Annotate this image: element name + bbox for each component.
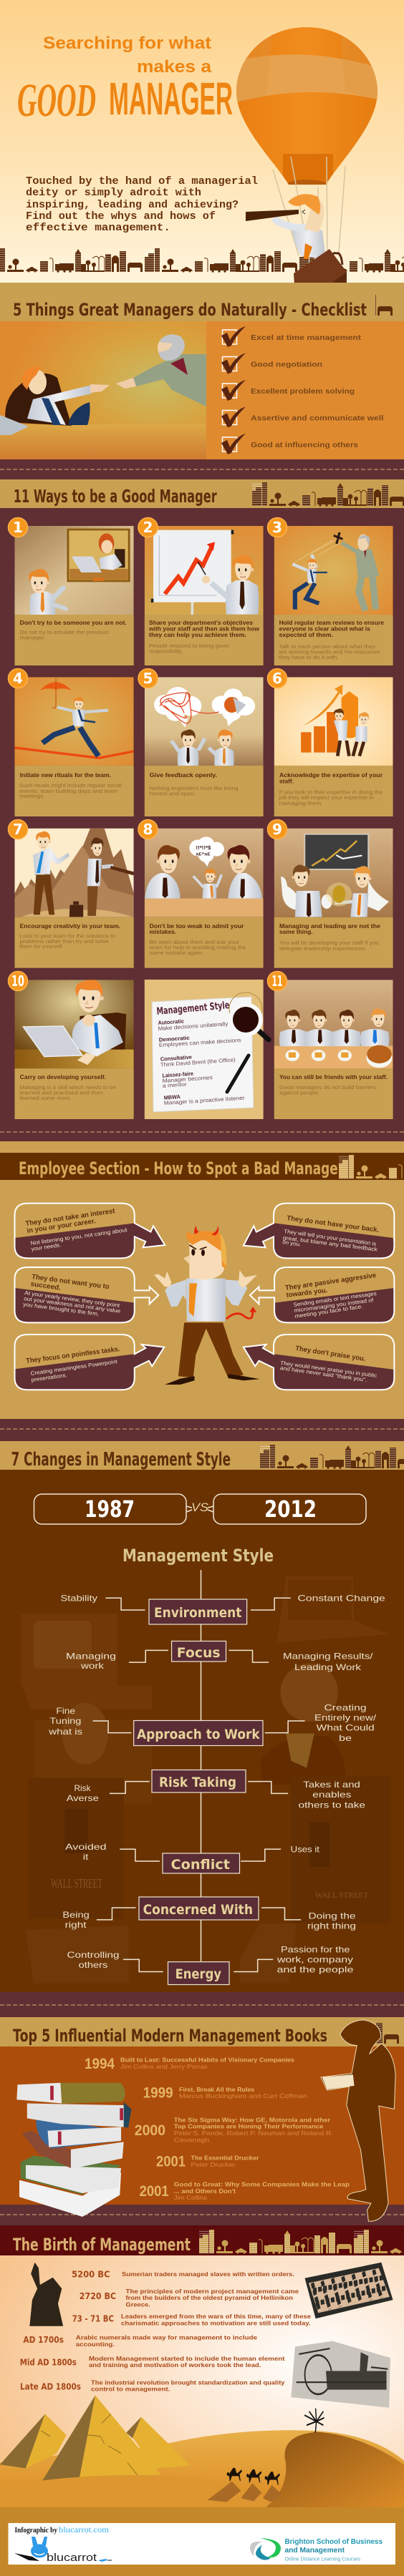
statue engraving xyxy=(29,2263,63,2326)
card copy xyxy=(19,619,388,1101)
card copy: managing them. xyxy=(279,800,323,806)
machine engraving xyxy=(291,2341,390,2408)
bubble copy: At your yearly review, they only point xyxy=(24,1289,121,1309)
bubble copy: They would never praise you in public xyxy=(280,1360,377,1379)
comparison labels: Entirely new/ xyxy=(314,1713,377,1723)
card 6 illustration xyxy=(274,677,393,766)
book list: Jim Collins xyxy=(174,2194,207,2201)
panel: top 5 books xyxy=(0,2017,404,2225)
comparison labels: Passion for the xyxy=(281,1945,350,1955)
comparison labels: Being xyxy=(62,1910,90,1920)
credit: brighton school: and Management xyxy=(285,2547,345,2555)
comparison labels: Averse xyxy=(67,1793,99,1803)
comparison labels: Risk xyxy=(74,1783,91,1793)
card 10 illustration xyxy=(15,979,134,1068)
illustrations rows one and two xyxy=(15,526,393,768)
bubble copy: They are passive aggressive xyxy=(284,1272,377,1292)
bubble: interest xyxy=(15,1204,165,1258)
card copy: Initiate new rituals for the team. xyxy=(20,771,111,779)
reading silhouette xyxy=(321,2020,395,2221)
note: management style: Consultative xyxy=(160,1054,192,1063)
bubble copy: succeed. xyxy=(30,1280,62,1292)
comparison labels: others to take xyxy=(298,1800,365,1810)
year comparison header: VS xyxy=(191,1501,209,1514)
card copy: they have to do it with. xyxy=(279,654,339,660)
bubble copy: in you or your career. xyxy=(27,1217,96,1235)
faint background images xyxy=(21,1576,390,1984)
bubble copy: They will tell you your presentation is xyxy=(284,1228,377,1247)
card 8 illustration: x£^x£ xyxy=(196,852,211,857)
year comparison header: 2012 xyxy=(264,1496,317,1523)
credit: blucarrot: Infographic by xyxy=(14,2527,57,2534)
credit: blucarrot: blucarrot xyxy=(47,2552,97,2564)
intro text xyxy=(26,175,258,234)
timeline events: Sumerian traders managed slaves with written orders. xyxy=(122,2270,294,2278)
card copy: against people. xyxy=(279,1089,319,1096)
credit: brighton school xyxy=(250,2538,383,2562)
card copy: honest and open. xyxy=(150,791,196,797)
comparison labels: Managing Results/ xyxy=(283,1652,373,1662)
timeline tree: Environment xyxy=(154,1605,241,1621)
heading: 11 ways: 11 Ways to be a Good Manager xyxy=(14,486,217,507)
timeline events: from the builders of the oldest pyramid of Hellinikon xyxy=(126,2294,293,2301)
book list xyxy=(85,2056,350,2201)
card copy: manager. xyxy=(20,634,46,641)
number badges: 6 xyxy=(272,670,282,687)
comparison labels: Doing the xyxy=(308,1911,356,1921)
bubble copy xyxy=(23,1207,380,1383)
card copy: Be open about them and ask your xyxy=(150,939,240,945)
note: management style: Autocratic xyxy=(158,1018,184,1026)
comparison labels: Constant Change xyxy=(298,1594,385,1604)
book list: 2001 xyxy=(156,2153,186,2170)
timeline events: AD 1700s xyxy=(23,2335,64,2345)
bubble copy: out your weakness and not any value xyxy=(24,1295,121,1314)
comparison labels: Tuning xyxy=(49,1716,81,1726)
bubble copy: They do not have your back. xyxy=(287,1214,380,1234)
card copy: Don't be too weak to admit your xyxy=(150,922,244,930)
bubble copy: meeting you face to face. xyxy=(294,1303,363,1319)
card copy: delegate leadership experiences. xyxy=(279,945,367,952)
card copy: mistakes. xyxy=(150,928,176,935)
bubble copy: you have brought to the firm. xyxy=(23,1301,100,1317)
note: management style: a mentor xyxy=(163,1081,188,1089)
intro text: Find out the whys and hows of xyxy=(26,210,216,223)
card copy: Look to your team for the solutions to xyxy=(20,933,115,940)
card 7 illustration xyxy=(15,829,135,917)
card 4 illustration xyxy=(15,677,134,766)
illustrations row four xyxy=(15,979,393,1068)
card 2 illustration xyxy=(145,526,264,615)
comparison labels xyxy=(48,1594,385,1975)
bubble copy: Creating meaningless Powerpoint xyxy=(30,1358,118,1377)
comparison labels: what is xyxy=(48,1727,82,1737)
year comparison header: 1987 xyxy=(85,1496,135,1523)
timeline events: Arabic numerals made way for management to include xyxy=(76,2334,257,2341)
heading: birth: The Birth of Management xyxy=(13,2235,191,2255)
timeline tree: Focus xyxy=(177,1645,221,1661)
panel: checklist section xyxy=(0,283,404,459)
card copy: expected of them. xyxy=(279,631,333,638)
card copy: problems rather than try and solve xyxy=(20,938,109,945)
panel: employee section, bad manager xyxy=(0,1141,404,1419)
bubble copy: on you. xyxy=(282,1239,302,1248)
timeline events: The industrial revolution brought standardization and quality xyxy=(91,2379,285,2386)
card copy: You will be developing your staff if you xyxy=(279,940,379,946)
intro text: Touched by the hand of a managerial xyxy=(26,175,258,187)
book stack xyxy=(16,2083,131,2217)
checklist: Good negotiation xyxy=(251,361,322,369)
number badges: 10 xyxy=(11,972,24,990)
book list: 2000 xyxy=(135,2122,165,2139)
book list: Good to Great: Why Some Companies Make the Leap xyxy=(174,2181,350,2188)
timeline tree: Approach to Work xyxy=(137,1727,260,1742)
card copy: same thing. xyxy=(279,928,313,935)
timeline events: accounting. xyxy=(76,2341,115,2348)
credit: blucarrot xyxy=(14,2524,112,2564)
card copy: Don't try to be someone you are not. xyxy=(20,619,127,626)
comparison labels: Fine xyxy=(56,1706,75,1716)
note: management style: Management Style xyxy=(156,1000,230,1018)
number badges: 9 xyxy=(272,821,282,838)
comparison labels: be xyxy=(339,1733,352,1743)
number badges: 5 xyxy=(143,670,153,687)
timeline events: Modern Management started to include the human element xyxy=(89,2355,285,2362)
book list: Peter Drucker xyxy=(191,2161,236,2168)
card copy: responsibility. xyxy=(149,648,183,655)
illustrations row three xyxy=(15,829,393,917)
number badges: 2 xyxy=(143,519,153,536)
card copy: Carry on developing yourself. xyxy=(20,1073,106,1080)
comparison labels: Leading Work xyxy=(294,1662,362,1672)
comparison labels: Creating xyxy=(324,1703,367,1713)
timeline events: 73 - 71 BC xyxy=(72,2313,114,2323)
book list: The Essential Drucker xyxy=(191,2154,259,2161)
note: management style: Make decisions unilaterally xyxy=(158,1020,229,1032)
card copy: events, team building days and team xyxy=(19,788,117,794)
desert scene xyxy=(0,2395,404,2507)
number badges: 3 xyxy=(272,519,282,536)
intro text: inspiring, leading and achieving? xyxy=(26,199,239,211)
number badges xyxy=(9,518,287,990)
number badges: 11 xyxy=(272,972,282,990)
timeline events: The principles of modern project management came xyxy=(126,2288,299,2295)
card copy: Hold regular team reviews to ensure xyxy=(279,619,384,626)
comparison labels: What Could xyxy=(317,1723,375,1733)
comparison labels: others xyxy=(79,1960,107,1970)
panel: footer credits xyxy=(0,2507,404,2576)
panel: 11 ways section xyxy=(0,479,404,1141)
card copy: learned and practised and then xyxy=(20,1089,103,1096)
devil manager character xyxy=(154,1226,260,1385)
timeline events xyxy=(20,2270,311,2393)
basket xyxy=(294,249,347,298)
timeline events: Mid AD 1800s xyxy=(20,2358,77,2368)
card copy: Managing and leading are not the xyxy=(279,922,380,930)
comparison labels: and the people xyxy=(276,1965,354,1975)
card copy: You can still be friends with your staff. xyxy=(279,1073,388,1080)
card copy: they can help you achieve them. xyxy=(149,631,246,638)
card copy: Nothing engenders trust like being xyxy=(150,785,239,791)
comparison labels: Uses it xyxy=(291,1845,320,1855)
bubble: pointless tasks xyxy=(15,1335,164,1390)
credit: blucarrot: blucarrot.com xyxy=(59,2524,110,2534)
bubble copy: great, but blame any bad feedback xyxy=(282,1234,378,1253)
card copy: If you look to their expertise in doing the xyxy=(279,789,383,796)
card 9 illustration xyxy=(274,829,393,917)
bubble: succeed xyxy=(15,1267,158,1322)
intro text: effective management. xyxy=(26,222,170,234)
title: Searching for what xyxy=(43,34,211,53)
card 8 illustration: !!*!!*$ xyxy=(196,844,211,851)
card copy: everyone is clear about what is xyxy=(279,625,370,633)
comparison labels: Takes it and xyxy=(303,1780,360,1790)
card copy: same mistake again. xyxy=(150,950,203,956)
card copy: Do not try to emulate the previous xyxy=(20,629,109,635)
number badges: 8 xyxy=(143,821,153,838)
bubble copy: They do not take an interest xyxy=(25,1207,116,1228)
engravings xyxy=(29,2263,393,2408)
timeline tree: Energy xyxy=(175,1966,222,1982)
timeline events: Leaders emerged from the wars of this time, many of these xyxy=(121,2313,311,2320)
card copy: learned some more. xyxy=(20,1095,72,1101)
book list: 2001 xyxy=(140,2183,169,2200)
note: management style: Laissez-faire xyxy=(162,1070,193,1079)
card 5 illustration xyxy=(145,677,264,768)
card 1 illustration xyxy=(15,526,134,616)
card 11 illustration xyxy=(274,980,393,1068)
timeline events: charismatic approaches to motivation are still used today. xyxy=(121,2320,311,2327)
book list: The Six Sigma Way: How GE, Motorola and other xyxy=(174,2117,331,2124)
card 8 illustration xyxy=(145,829,264,917)
checklist xyxy=(221,326,384,454)
card copy: job they will respect your expertise in xyxy=(279,794,374,801)
timeline tree: Risk Taking xyxy=(159,1775,236,1790)
bubble copy: presentations. xyxy=(31,1372,67,1383)
timeline tree: Concerned With xyxy=(143,1902,253,1918)
timeline tree: Conflict xyxy=(170,1857,230,1873)
card copy: Good managers do not build barriers xyxy=(279,1084,376,1091)
number badges: 1 xyxy=(13,519,23,536)
illustration: creation of manager xyxy=(0,321,206,459)
comparison labels: work, company xyxy=(276,1955,353,1965)
number badges: 4 xyxy=(13,670,23,687)
card copy: Share your department's objectives xyxy=(149,619,253,626)
comparison labels: work xyxy=(80,1661,105,1671)
number badges: 7 xyxy=(13,821,23,838)
timeline events: 2720 BC xyxy=(80,2291,116,2301)
card copy: Encourage creativity in your team. xyxy=(20,922,120,930)
title: MANAGER xyxy=(109,73,233,125)
note: management style: Think David Brent (the Office) xyxy=(160,1056,236,1068)
card copy: staff. xyxy=(279,778,294,785)
book list: Marcus Buckingham and Curt Coffman xyxy=(179,2092,307,2099)
bubble copy: and have never said "thank you". xyxy=(279,1365,367,1383)
card copy: Talk to each person about what they xyxy=(279,643,375,650)
note: management style: Manager is a proactive listener xyxy=(164,1095,245,1106)
hot air balloon xyxy=(233,27,381,255)
bubble copy: They focus on pointless tasks. xyxy=(26,1345,120,1365)
book list: Peter S. Pande, Robert P. Neuman and Roland R. xyxy=(174,2129,333,2137)
panel: the birth of management xyxy=(0,2225,404,2507)
timeline events: and training and motivation of workers took the lead. xyxy=(89,2361,261,2368)
panel: 7 changes in management style xyxy=(0,1441,404,1992)
timeline events: 5200 BC xyxy=(72,2270,110,2280)
panel: hero with balloon xyxy=(0,0,404,298)
title: GOOD xyxy=(17,74,96,127)
card copy: Acknowledge the expertise of your xyxy=(279,771,383,779)
comparison labels: it xyxy=(83,1852,89,1862)
man with telescope xyxy=(246,194,326,259)
card copy: team for help in avoiding making the xyxy=(150,945,246,950)
abacus xyxy=(305,2263,393,2318)
year comparison header xyxy=(34,1494,366,1524)
book list: 1999 xyxy=(143,2085,173,2102)
note: management style: Manager becomes xyxy=(162,1074,213,1084)
note: management style: Employees can make decisions xyxy=(159,1037,241,1048)
card copy: them for yourself. xyxy=(20,943,64,950)
comparison labels: Stability xyxy=(60,1594,97,1604)
card copy: Give feedback openly. xyxy=(150,771,217,779)
book list: Top Companies are Honing Their Performance xyxy=(174,2123,324,2130)
book list: ... and Others Don't xyxy=(174,2187,236,2195)
bubble copy: your needs. xyxy=(31,1241,62,1252)
comparison labels: Avoided xyxy=(65,1842,106,1852)
checklist: Excellent problem solving xyxy=(251,387,355,396)
bubble copy: micromanaging you instead of xyxy=(294,1297,375,1314)
bubble: back xyxy=(244,1204,394,1258)
book list: Built to Last: Successful Habits of Visionary Companies xyxy=(120,2057,294,2064)
card copy: People respond to being given xyxy=(149,643,229,649)
timeline tree xyxy=(92,1570,305,1985)
title xyxy=(17,34,233,127)
card copy: Managing is a skill which needs to be xyxy=(20,1084,116,1091)
skyline xyxy=(0,248,404,273)
bubble copy: Sending emails or text messages xyxy=(293,1290,377,1308)
checklist: Excel at time management xyxy=(251,333,362,342)
comparison labels: right thing xyxy=(307,1921,356,1931)
comparison labels: Controlling xyxy=(67,1950,119,1960)
checklist: Assertive and communicate well xyxy=(251,414,384,422)
timeline events: Greece. xyxy=(126,2301,150,2308)
card copy: with your staff and then ask them how xyxy=(148,625,259,633)
book list: Jim Collins and Jerry Porras xyxy=(120,2063,208,2070)
book list: 1994 xyxy=(85,2056,115,2072)
bubble copy: Not listening to you, not caring about xyxy=(30,1226,128,1246)
card 3 illustration xyxy=(274,526,393,615)
timeline events: Late AD 1800s xyxy=(20,2382,81,2392)
checklist: Good at influencing others xyxy=(251,441,358,449)
comparison labels: enables xyxy=(312,1790,351,1800)
subheading: management style: Management Style xyxy=(122,1546,274,1566)
intro text: deity or simply adroit with xyxy=(26,187,201,199)
panel: 7 changes in management style: WALL STREET xyxy=(51,1876,102,1890)
bubble copy: towards you. xyxy=(286,1287,328,1299)
note: management style: MBWA xyxy=(164,1093,181,1101)
bubble copy: They do not want you to xyxy=(32,1273,110,1291)
card copy: Such rituals might include regular social xyxy=(19,782,122,789)
bubble: praise xyxy=(244,1335,394,1390)
note: management style: Democratic xyxy=(159,1035,190,1043)
timeline events: control to management. xyxy=(91,2386,170,2393)
heading: 7 changes: 7 Changes in Management Style xyxy=(11,1449,231,1470)
book list: Cavanagh xyxy=(174,2136,210,2143)
credit: brighton school: Online Distance Learning Courses xyxy=(285,2556,360,2562)
title: makes a xyxy=(137,57,212,77)
comparison labels: Managing xyxy=(66,1652,116,1662)
panel: 7 changes in management style: WALL STREET xyxy=(315,1891,368,1900)
comparison labels: right xyxy=(65,1920,87,1930)
bubble: passive aggressive xyxy=(250,1267,394,1322)
book list: First, Break All the Rules xyxy=(179,2086,255,2093)
note: management style xyxy=(145,980,269,1119)
bubble copy: They don't praise you. xyxy=(295,1345,366,1363)
credit: brighton school: Brighton School of Business xyxy=(285,2538,383,2546)
card copy: are working towards and the resources xyxy=(279,649,380,655)
card copy: meetings. xyxy=(19,793,45,799)
